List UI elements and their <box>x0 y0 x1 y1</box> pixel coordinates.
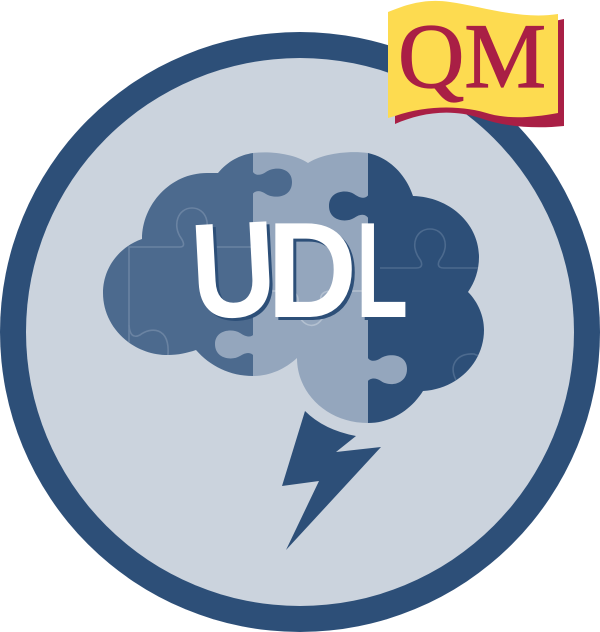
faint puzzle outlines <box>129 208 368 355</box>
brain cloud puzzle <box>103 152 484 423</box>
QM flag logo <box>388 1 564 127</box>
puzzle tab: lower right piece <box>367 355 407 384</box>
QM letters: QM <box>398 5 546 107</box>
flag shadow <box>395 19 564 127</box>
UDL title: L <box>359 197 411 349</box>
UDL title: U <box>190 194 283 351</box>
UDL title: L <box>356 194 408 346</box>
UDL title: D <box>270 197 360 349</box>
lightning bolt <box>282 411 381 550</box>
UDL title <box>187 192 411 351</box>
UDL title: D <box>267 194 357 346</box>
UDL title: U <box>187 192 280 348</box>
puzzle tab: top right piece <box>329 192 369 220</box>
puzzle tab: lower left piece <box>215 331 254 358</box>
puzzle tab: top left piece <box>252 169 292 197</box>
flag body <box>388 1 558 118</box>
